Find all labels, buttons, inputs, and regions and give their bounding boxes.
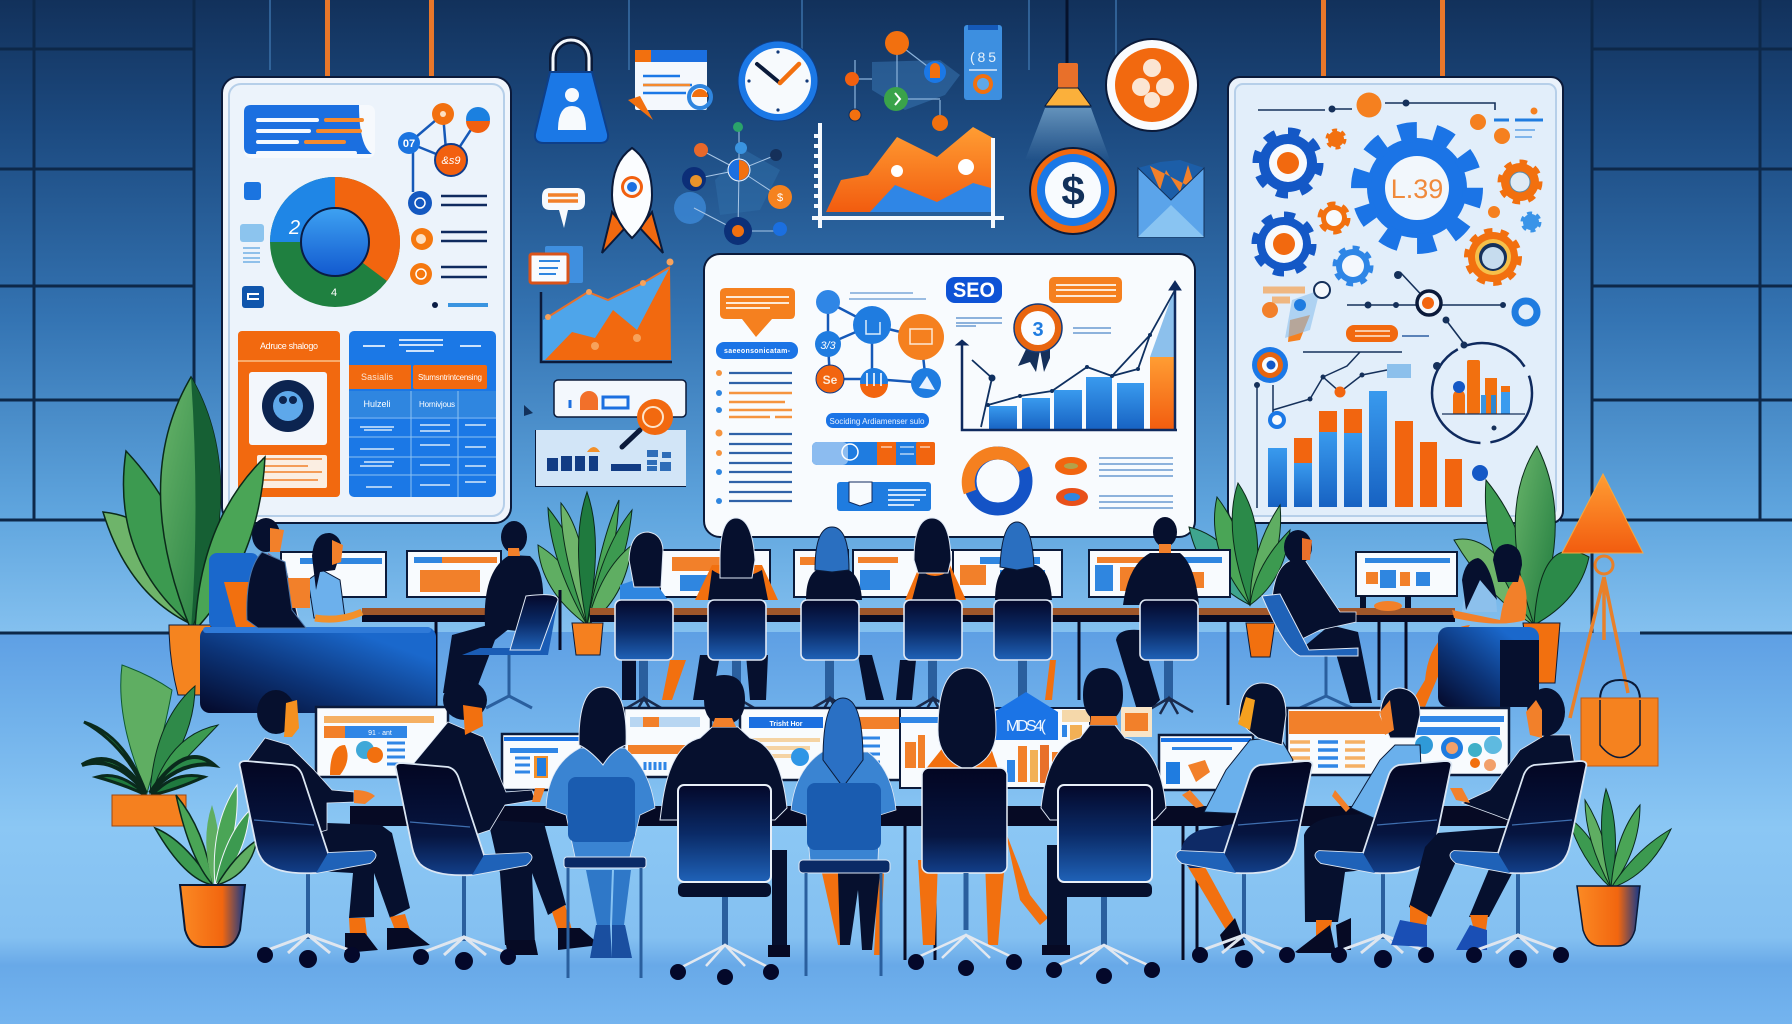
front monitor 4: Trisht Hor	[769, 721, 803, 728]
back row monitors	[281, 550, 1457, 597]
front monitor 4	[740, 708, 920, 780]
progress bar	[812, 442, 935, 465]
plant: back right	[1189, 483, 1290, 657]
back row desks	[362, 590, 1455, 712]
panel: SEO dashboard	[704, 254, 1195, 537]
blue table	[349, 331, 496, 497]
donut chart small	[968, 453, 1026, 509]
bar chart	[1268, 391, 1462, 507]
text list	[716, 370, 792, 504]
back row person: side man with chair	[443, 521, 558, 708]
icon: dollar badge: $	[1061, 167, 1085, 214]
large gear: L.39	[1391, 174, 1443, 204]
back row person: man on sofa	[247, 518, 300, 625]
legend items	[408, 191, 488, 308]
front monitor 5 with MDS4 tag: MDS4(	[1006, 718, 1047, 735]
orange card: Adruce shalogo	[260, 341, 318, 351]
front row desk	[350, 806, 1535, 960]
chart: orange area chart	[541, 258, 674, 362]
label pill	[826, 413, 929, 428]
node diagram: 3/3	[820, 340, 837, 352]
node network: 07	[403, 138, 415, 150]
person: front 8 woman side view	[1176, 683, 1312, 968]
blue table: Sasialis	[361, 372, 394, 382]
back row monitor right	[1360, 596, 1411, 611]
floor lamp	[1562, 474, 1643, 718]
gears left	[1256, 130, 1371, 284]
icon: ceiling lamp	[1025, 0, 1110, 160]
panel: left dashboard	[222, 77, 511, 523]
SEO badge: SEO	[953, 279, 995, 302]
chart: top area chart	[812, 123, 1004, 228]
person: front 3 woman on stool	[546, 687, 655, 978]
plant: large right	[1454, 446, 1589, 683]
front monitor 5 with MDS4 tag	[900, 692, 1152, 788]
back row person: woman on sofa	[308, 533, 362, 619]
donut chart	[270, 177, 400, 307]
icon cluster: central network	[674, 122, 792, 245]
icon: browser card	[628, 50, 711, 120]
back row chairs	[615, 600, 1198, 714]
plant: lower left with box pot	[82, 665, 218, 826]
person: front 6 woman long hair	[908, 668, 1048, 976]
panel: search card	[524, 380, 686, 486]
node network	[398, 103, 490, 192]
person: front 7 man back view	[1041, 668, 1166, 984]
node diagram: Se	[823, 373, 838, 387]
icon: orange circle	[1106, 39, 1198, 131]
blue card	[837, 482, 931, 511]
orange pill	[1346, 325, 1429, 342]
icon: rocket	[602, 148, 663, 253]
gears right	[1467, 162, 1540, 481]
sofa right with two women	[1410, 544, 1539, 707]
icon: chat bubble	[542, 188, 585, 228]
icon: phone: (85	[970, 49, 996, 65]
medal	[1014, 304, 1062, 372]
panel: right dashboard with gears	[1228, 77, 1563, 523]
icon: envelope	[1138, 160, 1204, 237]
shopping bag	[1581, 680, 1658, 766]
blue label pill	[716, 342, 798, 359]
back row person: woman D	[896, 518, 966, 700]
icon cluster: network top	[845, 31, 960, 131]
donut chart: 2	[288, 217, 300, 239]
side icons	[240, 182, 264, 308]
timeline top	[1258, 92, 1543, 144]
back row person: hooded C	[806, 527, 884, 700]
mid connectors	[1262, 271, 1506, 345]
icon: lock with person	[535, 40, 608, 143]
front monitor 2	[502, 734, 582, 790]
node diagram	[815, 290, 944, 398]
icon: phone	[964, 25, 1002, 100]
back row person: man F	[1116, 517, 1199, 720]
floor	[0, 632, 1792, 1024]
plant: lower right	[1568, 789, 1671, 946]
person: front 1 seated side view	[240, 690, 430, 968]
line graph with ring icon	[1252, 347, 1411, 508]
node network: &s9	[442, 155, 460, 167]
orange speech bubble	[720, 288, 795, 337]
back row person: man G with chair	[1262, 530, 1372, 708]
person: front 5 hooded on stool	[791, 698, 896, 976]
blue label pill: saeeonsonicatam-	[724, 348, 791, 355]
icon: clock	[738, 41, 818, 121]
blue table: Hulzeli	[364, 399, 390, 409]
person: front 2 seated side view	[396, 680, 600, 970]
wall background	[0, 0, 1792, 640]
sofa left	[200, 552, 436, 713]
front monitor 1: 91 · ant	[368, 730, 392, 737]
person: front 4 man back view	[660, 675, 790, 985]
back row person: woman B	[693, 518, 778, 700]
hanging posts	[325, 0, 1445, 78]
plant: lower left with round pot	[155, 785, 257, 947]
bar chart with growth line	[956, 281, 1181, 430]
front monitor 1	[316, 707, 448, 777]
front monitor 7	[1287, 708, 1509, 775]
icon: small document card	[530, 246, 583, 283]
front monitor 6	[1159, 735, 1253, 790]
person: front 9 woman side view	[1295, 688, 1451, 968]
label pill: Sociding Ardiamenser sulo	[830, 417, 925, 426]
large gear	[1361, 132, 1473, 244]
left window grid	[0, 0, 1792, 633]
icon cluster: central network: $	[777, 192, 783, 204]
medal: 3	[1032, 319, 1044, 341]
front monitor 3	[624, 708, 711, 777]
icon: dollar badge	[1030, 148, 1116, 234]
text card	[244, 105, 375, 158]
blue table: Stumsntrintcensing	[418, 373, 482, 382]
circular mini chart	[1432, 342, 1532, 443]
orange card	[238, 331, 340, 497]
plant: large left	[103, 377, 265, 695]
plant: middle back	[538, 492, 632, 655]
donut chart: 4	[331, 287, 337, 299]
blue table: Hornivjous	[419, 400, 455, 409]
person: front 10 man side view	[1391, 688, 1586, 968]
legend ovals	[1055, 457, 1173, 508]
back row person: hooded E	[995, 522, 1056, 700]
orange note	[1049, 277, 1122, 303]
back row person: woman A	[620, 532, 686, 700]
